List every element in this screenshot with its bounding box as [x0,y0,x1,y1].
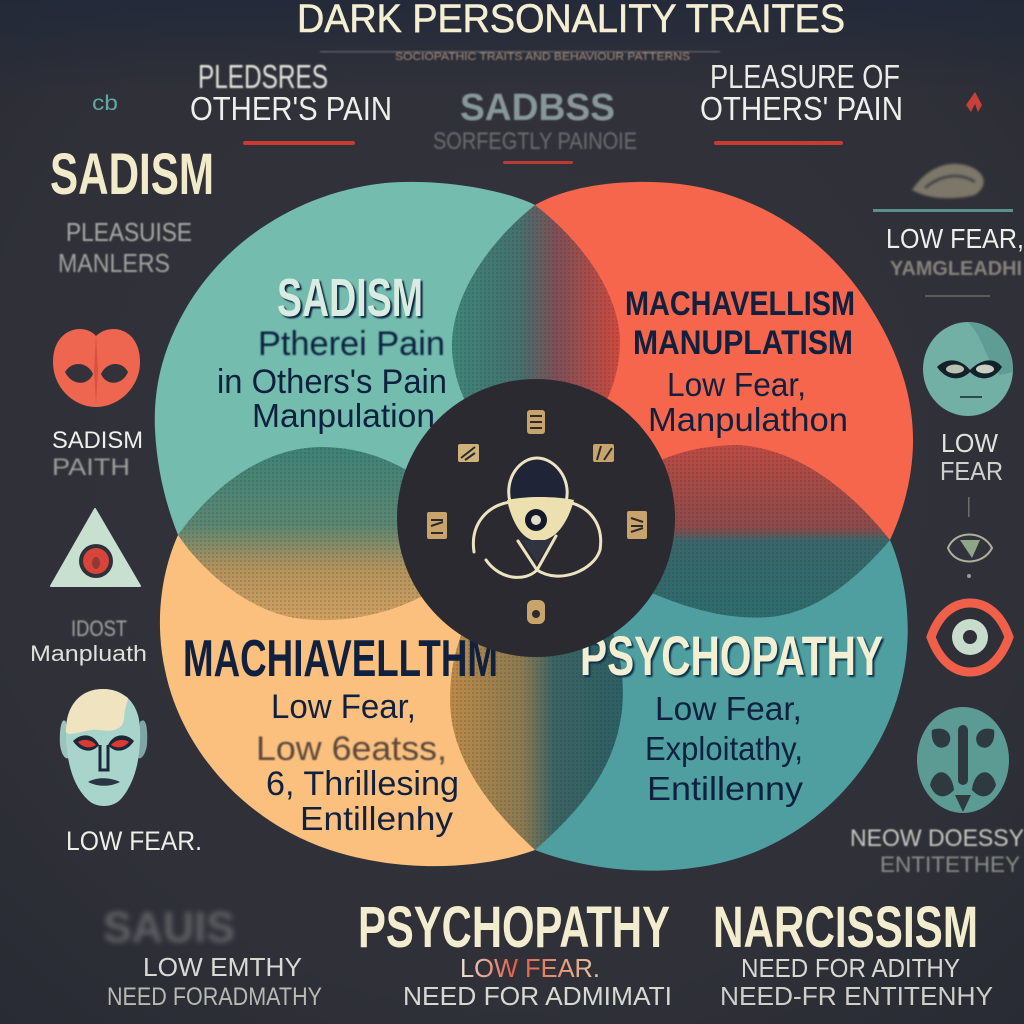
text block: machiavellism section: Manpulathon [648,401,848,438]
overlap: left [178,447,430,620]
left heading: sadism: SADISM [50,142,214,207]
left label: manipulation [30,616,147,666]
text block: psychopathy section: Low Fear, [655,690,802,727]
right label: entitlement: ENTITETHEY [880,852,1020,877]
bottom left block: SAUIS [103,903,235,952]
petal: teal sadism [155,182,536,590]
petal: dark teal psychopathy [520,519,908,871]
left label: manipulation: Manpluath [30,641,147,666]
bottom left block: LOW EMTHY [143,952,302,982]
text block: sadism section: in Others's Pain [217,363,447,401]
left heading: sadism: PLEASUISE [66,217,192,247]
icon: glyph tile top [527,410,545,434]
text block: orange section [183,630,498,837]
bottom left block [103,903,322,1011]
text block: machiavellism section: MANUPLATISM [633,324,853,362]
overlap: right [645,445,890,618]
right label: low fear [886,223,1024,297]
overlap: bottom [450,625,623,850]
bottom centre block [358,895,672,1011]
icon: bald head [60,689,147,806]
left heading: sadism [50,142,214,278]
right label: low fear stacked: LOW [941,428,998,458]
bottom right block: NEED-FR ENTITENHY [720,981,993,1011]
icon: glyph tile upper right [593,444,614,462]
text block: sadism section: Ptherei Pain [258,325,445,363]
text block: orange section: 6, Thrillesing [266,765,459,803]
panel: venn diagram [155,182,913,871]
right label: low fear stacked: FEAR [940,456,1003,486]
petal: orange machiavellianism [160,519,560,866]
top centre blurred block: SORFEGTLY PAINOIE [433,128,637,155]
right label: low fear stacked [940,428,1003,486]
icon: triangle eye [51,509,140,586]
text block: psychopathy section [580,624,885,807]
text block: sadism section: SADISM [277,268,423,328]
petal: red machiavellism [535,182,913,590]
text block: machiavellism section: MACHAVELLISM [625,285,855,323]
left label: sadism: PAITH [52,454,130,481]
top centre blurred block [433,87,637,164]
text block: sadism section: SADISM [279,270,425,330]
bottom centre block: NEED FOR ADMIMATI [403,981,672,1011]
right label: entitlement [850,825,1024,877]
bottom centre block: PSYCHOPATHY [358,895,670,960]
top left text block: PLEDSRES [198,58,328,95]
text block: orange section: Low 6eatss, [256,730,447,768]
text block: psychopathy section: Exploitathy, [645,730,803,767]
icon: teal masked face [923,322,1013,416]
text block: sadism section: Manpulation [252,397,435,434]
left label: manipulation: IDOST [71,616,127,641]
bottom left block: NEED FORADMATHY [107,983,322,1011]
bottom right block: NEED FOR ADITHY [741,953,960,983]
top right text block: PLEASURE OF [710,58,900,95]
icon: small gem [948,497,992,578]
text block: machiavellism section: Low Fear, [667,366,806,403]
icon: teal tribal mask [917,707,1009,813]
icon: triple ring symbol [473,458,601,577]
text block: psychopathy section: Entillenny [647,770,804,807]
right top rule [873,209,1013,212]
right label: low fear: YAMGLEADHI [890,258,1022,280]
text block: psychopathy section: PSYCHOPATHY [582,626,885,689]
subtitle strip: SOCIOPATHIC TRAITS AND BEHAVIOUR PATTERNS [395,51,690,63]
left label: sadism: SADISM [52,427,143,454]
text block: machiavellism section [625,285,855,438]
left label: low fear: LOW FEAR. [66,826,202,856]
text block: orange section: Low Fear, [271,688,416,726]
icon: glyph tile right [627,511,647,539]
overlap: top [452,205,620,450]
text block: orange section: Entillenhy [300,800,454,837]
icon: small red mark [966,92,982,112]
icon: glyph tile upper left [458,444,479,462]
icon: red mask [53,329,140,407]
text block: psychopathy section: PSYCHOPATHY [580,624,883,687]
left label: sadism [52,427,143,481]
top left text block: OTHER'S PAIN [190,90,392,127]
text block: sadism section [217,268,447,434]
icon: glyph tile left [427,512,447,539]
icon: small teal mark: cb [92,92,118,115]
text block: orange section: MACHIAVELLTHM [183,630,498,688]
bottom right block [713,895,993,1011]
icon: faded brain sketch [912,164,984,198]
icon: red eye [931,603,1009,672]
icon: glyph tile bottom [527,600,545,624]
left heading: sadism: MANLERS [58,248,170,278]
top left text block [190,58,392,145]
centre disc [397,379,675,657]
top right text block [700,58,903,145]
top centre blurred block: SADBSS [460,87,615,129]
top right text block: OTHERS' PAIN [700,90,903,127]
bottom centre block: LOW FEAR. [460,953,600,983]
